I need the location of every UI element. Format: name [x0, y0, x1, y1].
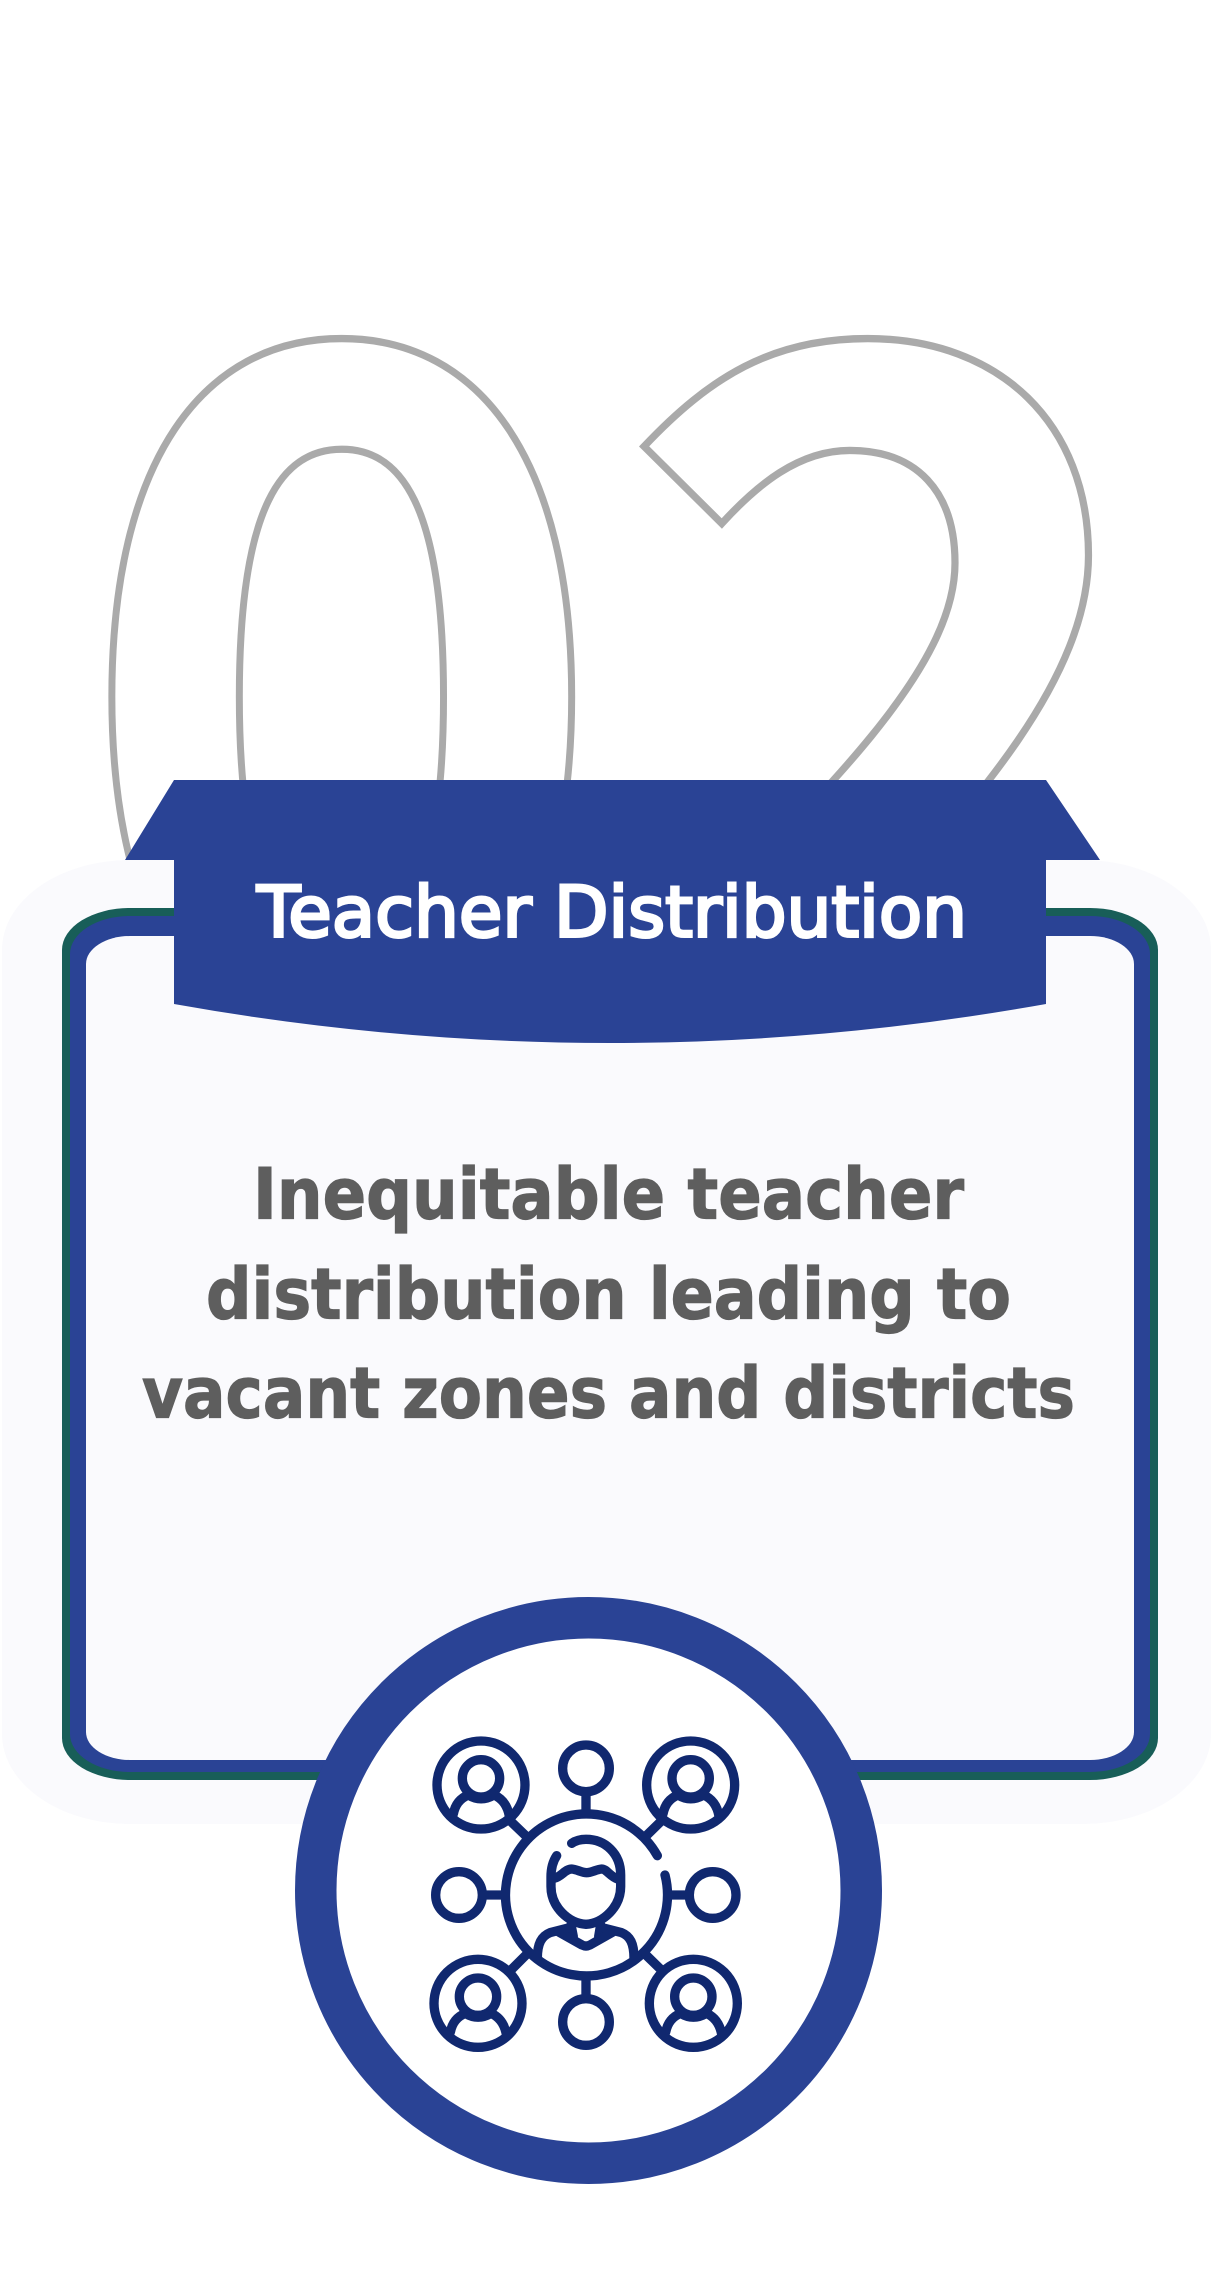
- text block: description: vacant zones and districts: [142, 1352, 1075, 1434]
- heading: Teacher Distribution: Teacher Distribution: [256, 872, 967, 954]
- icon ring: [316, 1618, 861, 2163]
- text block: description: [142, 1154, 1075, 1434]
- ribbon banner: [125, 780, 1100, 1043]
- icon: teacher network: [434, 1741, 737, 2047]
- person top left: [437, 1741, 525, 1829]
- text block: description: Inequitable teacher: [253, 1154, 964, 1236]
- person bottom right: [649, 1959, 737, 2047]
- central teacher figure: [537, 1839, 634, 1958]
- person top right: [647, 1741, 735, 1829]
- panel: green and blue card frame: [62, 908, 1158, 1780]
- text block: description: distribution leading to: [206, 1254, 1011, 1336]
- person bottom left: [434, 1959, 522, 2047]
- large outlined number 02: [72, 0, 1170, 1324]
- panel: light background card: [2, 860, 1211, 1824]
